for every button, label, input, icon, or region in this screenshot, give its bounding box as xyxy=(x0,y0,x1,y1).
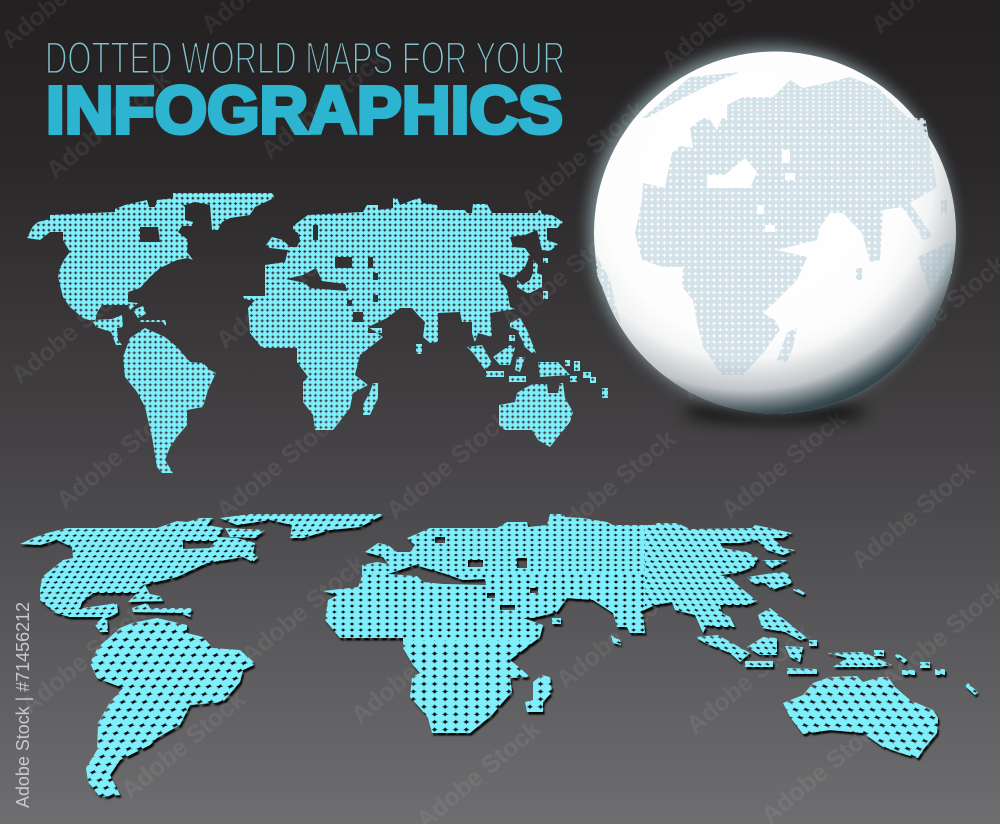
perspective madagascar xyxy=(525,675,552,712)
australia xyxy=(499,383,573,447)
flat world map xyxy=(27,193,608,473)
greenland xyxy=(173,193,274,230)
watermark: Adobe Stock xyxy=(346,610,481,730)
perspective australia xyxy=(783,676,938,758)
globe shadow xyxy=(683,401,867,423)
watermark: Adobe Stock xyxy=(211,405,346,525)
north america xyxy=(27,198,193,345)
south america xyxy=(123,328,216,473)
perspective eurasia and africa xyxy=(323,514,795,733)
perspective world map xyxy=(20,514,978,797)
globe xyxy=(590,47,956,423)
watermark: Adobe Stock xyxy=(211,235,346,355)
watermark: Adobe Stock xyxy=(496,215,631,335)
globe glow xyxy=(590,47,952,409)
perspective north america xyxy=(20,518,258,617)
watermark: Adobe Stock xyxy=(256,45,391,165)
perspective arctic islands xyxy=(225,528,265,538)
watermark: Adobe Stock xyxy=(716,405,851,525)
watermark: Adobe Stock xyxy=(116,685,251,805)
heading: infographics: INFOGRAPHICS xyxy=(46,73,563,148)
watermark: Adobe Stock xyxy=(676,285,811,405)
eurasia and africa xyxy=(243,198,563,430)
watermark: Adobe Stock xyxy=(681,620,816,740)
perspective greenland xyxy=(220,514,385,538)
watermark: Adobe Stock xyxy=(846,455,981,575)
watermark: Adobe Stock xyxy=(41,65,176,185)
perspective asian islands xyxy=(552,560,978,695)
globe sphere xyxy=(594,52,956,414)
madagascar xyxy=(363,383,378,415)
globe land xyxy=(595,72,953,375)
asian islands xyxy=(416,258,608,398)
globe shading xyxy=(594,52,956,414)
watermark: Adobe Stock xyxy=(236,550,371,670)
watermark: Adobe Stock xyxy=(51,395,186,515)
perspective south america xyxy=(86,618,256,797)
watermark: Adobe Stock xyxy=(551,575,686,695)
stock id caption: Adobe Stock | #71456212 xyxy=(12,602,33,808)
watermark: Adobe Stock xyxy=(16,600,151,720)
watermark: Adobe Stock xyxy=(381,405,516,525)
watermark: Adobe Stock xyxy=(546,425,681,545)
title line: DOTTED WORLD MAPS FOR YOUR xyxy=(45,32,565,84)
watermark: Adobe Stock xyxy=(516,95,651,215)
perspective central america and caribbean xyxy=(52,585,192,632)
watermark: Adobe Stock xyxy=(6,270,141,390)
